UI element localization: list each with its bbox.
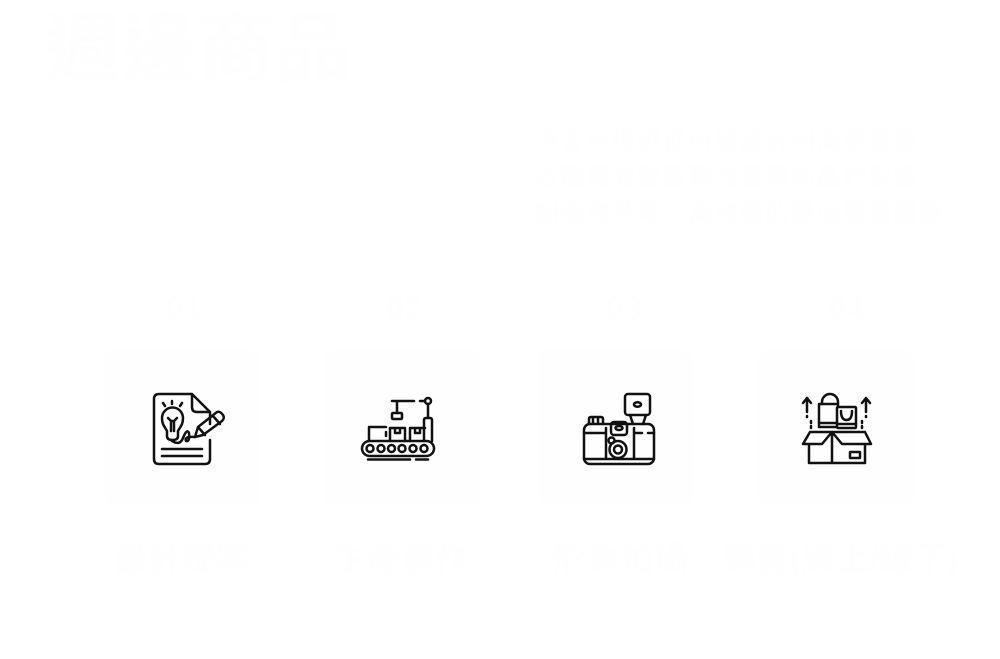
label: photography: 形象拍攝 xyxy=(552,541,688,579)
icon: conveyor belt with robot arm xyxy=(362,398,434,460)
label: sales: 銷售(線上/線下) xyxy=(722,541,958,579)
icon: camera with flash xyxy=(584,394,654,464)
step number 04: 04 xyxy=(828,290,864,326)
label: design proposal: 設計提案 xyxy=(114,541,250,579)
step number 02: 02 xyxy=(386,290,422,326)
title: 週邊商品 xyxy=(44,7,352,92)
description text xyxy=(535,124,970,232)
description text: 為客戶提供從研發設計到商業量產, xyxy=(535,128,927,155)
description text: 各階段完整服務流程與商品代製造, xyxy=(535,164,927,191)
card: photography xyxy=(538,350,693,505)
label: production: 生產製作 xyxy=(333,541,469,579)
description text: 創造高效率、高效能的最佳服務體驗。 xyxy=(535,200,970,227)
step number 03: 03 xyxy=(606,290,642,326)
step number 01: 01 xyxy=(166,290,202,326)
card: design xyxy=(105,350,260,505)
card: production xyxy=(324,350,479,505)
card: sales xyxy=(758,350,915,505)
icon: open box with shopping bags xyxy=(803,394,871,463)
icon: document with light bulb and pencil xyxy=(154,394,224,464)
